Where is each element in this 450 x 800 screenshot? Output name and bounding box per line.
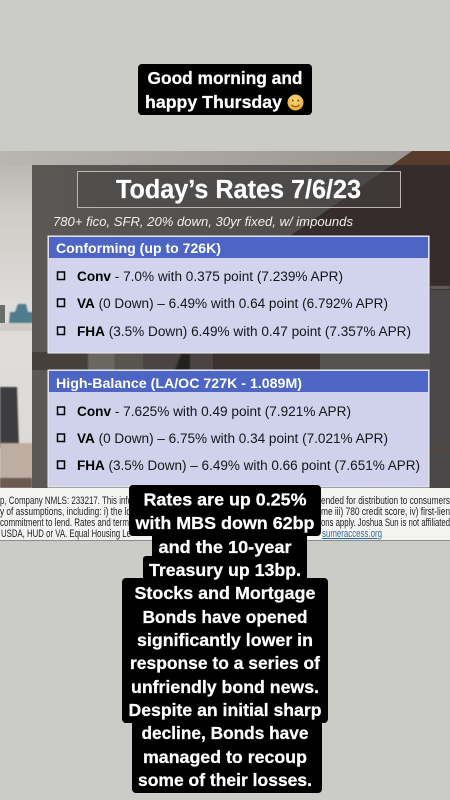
icon: smiling face emoji xyxy=(288,94,304,110)
market commentary caption: managed to recoup xyxy=(143,747,307,767)
market commentary caption: significantly lower in xyxy=(137,630,313,650)
rate: conforming va: VA (0 Down) – 6.49% with 0.64 point (6.792% APR) xyxy=(77,296,388,312)
header: high-balance xyxy=(49,371,428,392)
rate: conforming conv: Conv - 7.0% with 0.375 point (7.239% APR) xyxy=(77,269,343,285)
market commentary caption: and the 10-year xyxy=(158,537,292,557)
title box xyxy=(78,172,400,208)
rate: high-balance fha: FHA (3.5% Down) – 6.49% with 0.66 point (7.651% APR) xyxy=(77,458,420,474)
legal disclaimer strip: sumeraccess.org xyxy=(322,528,382,540)
market commentary caption: with MBS down 62bp xyxy=(134,513,315,533)
market commentary caption: Despite an initial sharp xyxy=(128,700,322,720)
market commentary caption: Stocks and Mortgage xyxy=(134,583,316,603)
market commentary caption: Bonds have opened xyxy=(142,607,308,627)
legal disclaimer strip: y of assumptions, including: i) the lo xyxy=(0,506,131,518)
legal disclaimer strip: p, Company NMLS: 233217. This info xyxy=(0,495,132,507)
legal disclaimer strip: commitment to lend. Rates and term xyxy=(0,517,129,529)
greeting caption: happy Thursday xyxy=(145,92,282,112)
market commentary caption: Rates are up 0.25% xyxy=(144,490,307,510)
title box: Today’s Rates 7/6/23 xyxy=(116,176,361,204)
dark overlay panel xyxy=(32,165,450,490)
header: high-balance: High-Balance (LA/OC 727K - 1.089M) xyxy=(56,375,302,391)
background photo of living room xyxy=(0,151,450,488)
panel: conforming rates xyxy=(48,236,429,353)
header: conforming xyxy=(49,237,428,258)
rate: conforming fha: FHA (3.5% Down) 6.49% with 0.47 point (7.357% APR) xyxy=(77,324,411,340)
market commentary caption xyxy=(122,485,328,793)
header: conforming: Conforming (up to 726K) xyxy=(56,240,221,256)
market commentary caption: decline, Bonds have xyxy=(142,723,309,743)
market commentary caption: Treasury up 13bp. xyxy=(149,560,301,580)
market commentary caption: some of their losses. xyxy=(138,770,312,790)
legal disclaimer strip xyxy=(0,488,450,541)
market commentary caption: unfriendly bond news. xyxy=(131,677,319,697)
rate: high-balance conv: Conv - 7.625% with 0.49 point (7.921% APR) xyxy=(77,404,351,420)
subtitle: 780+ fico, SFR, 20% down, 30yr fixed, w/ impounds xyxy=(53,214,353,229)
rate: high-balance va: VA (0 Down) – 6.75% with 0.34 point (7.021% APR) xyxy=(77,431,388,447)
greeting caption: Good morning and xyxy=(148,68,302,88)
market commentary caption: response to a series of xyxy=(130,653,320,673)
legal disclaimer strip: USDA, HUD or VA. Equal Housing Le xyxy=(1,528,131,540)
greeting caption xyxy=(138,64,312,115)
panel: high-balance rates xyxy=(48,370,429,487)
